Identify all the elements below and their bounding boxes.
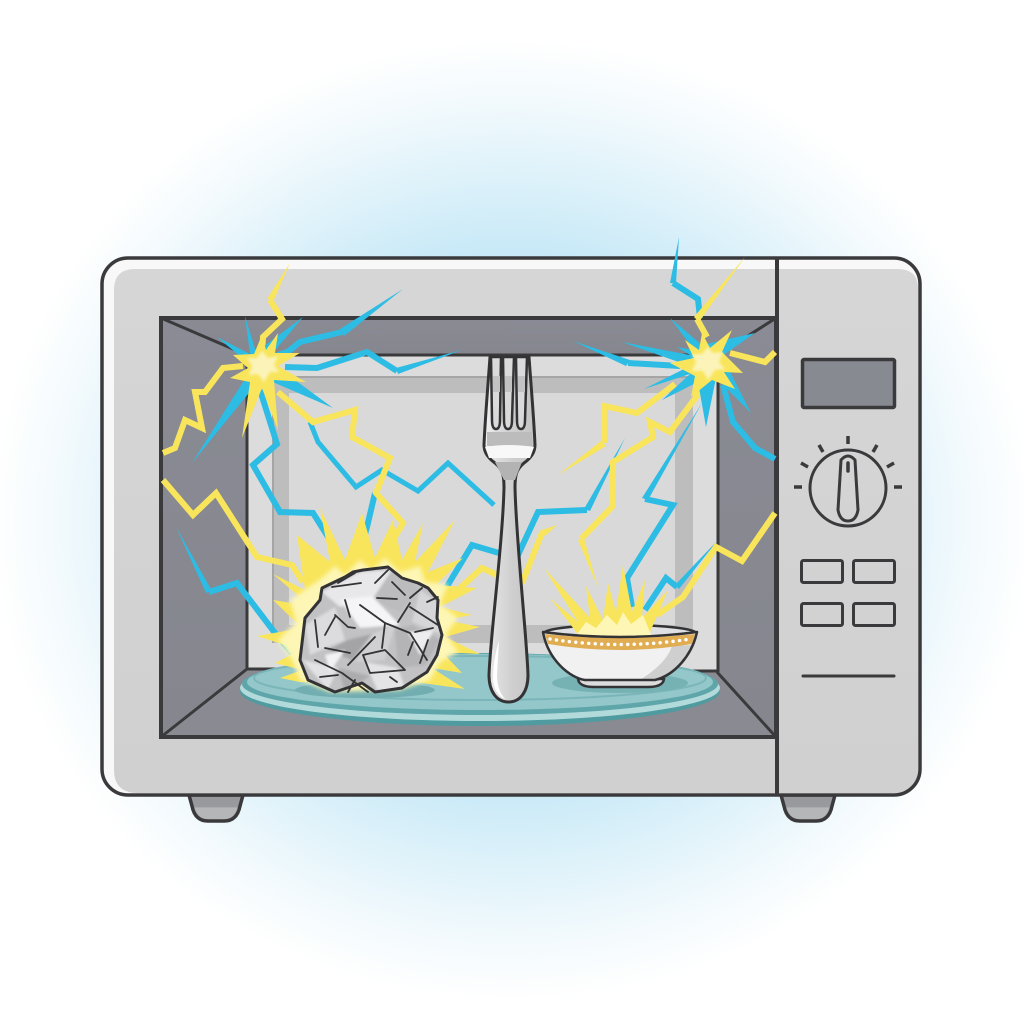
blue bolt tips (176, 237, 718, 593)
spark burst around foil (257, 508, 480, 692)
spark: top left corner (192, 316, 333, 463)
indicator line (803, 674, 894, 678)
spark: top right corner (622, 318, 755, 427)
blue lightning bolts (209, 283, 775, 657)
microwave body (102, 258, 920, 795)
display screen (802, 360, 894, 408)
buttons (802, 560, 894, 626)
timer dial (794, 436, 902, 526)
control panel (794, 360, 902, 676)
oven cavity (161, 318, 776, 737)
bowl with gold rim (543, 565, 697, 687)
spark burst in bowl (544, 565, 668, 637)
fork (484, 357, 535, 702)
yellow bolt tips (267, 257, 745, 588)
feet (189, 795, 835, 821)
yellow lightning bolts (163, 300, 775, 615)
crumpled foil ball (300, 567, 442, 692)
glass turntable plate (240, 653, 720, 726)
